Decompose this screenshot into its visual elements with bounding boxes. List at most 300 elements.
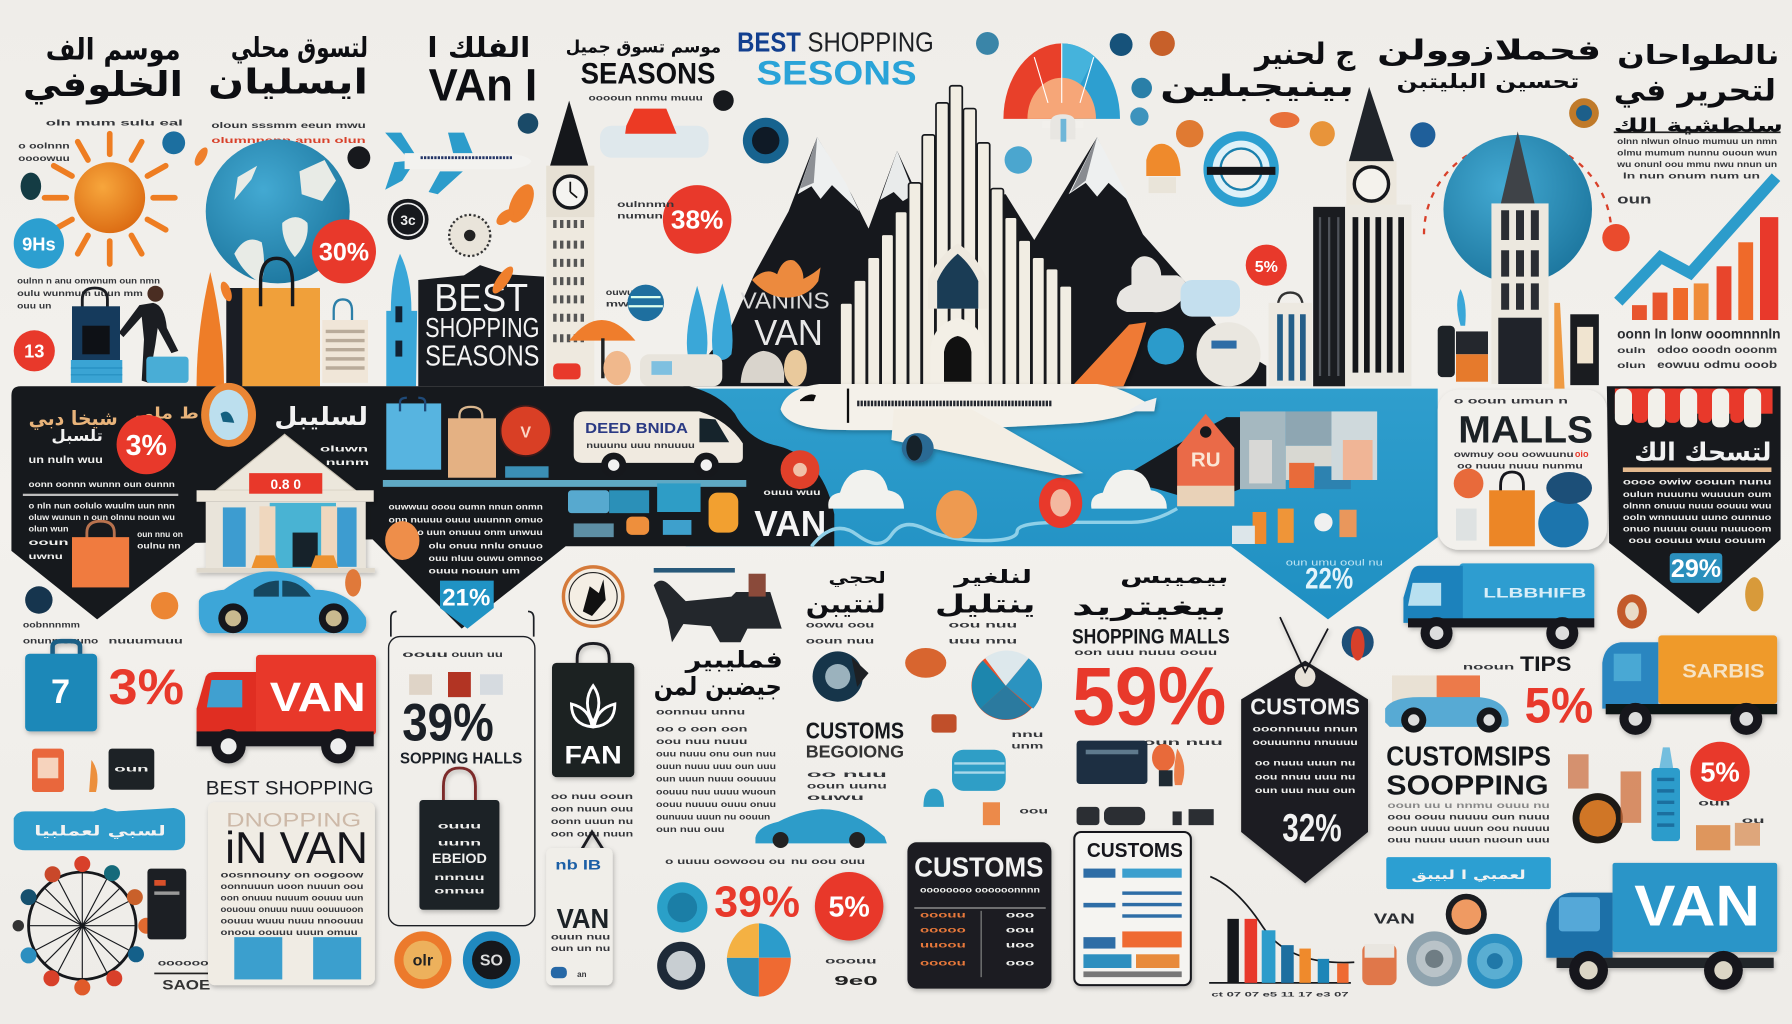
heading: arabic center: فمليبير — [685, 647, 783, 673]
text block: small notes center: mwnu — [606, 299, 646, 308]
text block: shield body: oooo owiw oouun nunu — [1623, 478, 1772, 487]
text block: shield lines: uwnu — [29, 552, 63, 561]
text block: left notes: ouu un — [17, 302, 52, 311]
tag: customs 32%: 32% — [1282, 807, 1342, 850]
text block: shield lines — [23, 455, 183, 561]
panel: dark band left — [11, 386, 834, 629]
text: malls: MALLS — [1458, 408, 1593, 450]
text block: under bag: oon ouu nuun — [551, 830, 633, 839]
icon: sun — [45, 134, 175, 264]
icon: black bag: EBEIOD — [432, 851, 487, 866]
icons: small items — [32, 749, 154, 792]
text block: in van body: oonnuuun uoon nuuun oou — [221, 882, 364, 891]
tag: customs 32%: oun uuu nuu oun — [1255, 786, 1356, 795]
badge: red 38% — [663, 185, 731, 254]
icon: bag fan — [552, 643, 634, 777]
text block: center column: oonnuu unnu — [656, 707, 745, 716]
icon: blue blob — [1538, 499, 1589, 547]
text block: shield 2: ouu nluu ouwu omnoo — [429, 554, 543, 563]
badge: grey seal — [449, 215, 490, 256]
heading: arabic column 2: olumnnenn anun olun — [211, 136, 366, 145]
text: malls notes: o ooun umun n — [1454, 396, 1568, 405]
text: shield heading — [29, 403, 199, 445]
text block: customsips body: oou oouu nuuuu oun nuuu — [1387, 812, 1550, 821]
text: blue panel 22%: oun umu ooul nu — [1286, 558, 1383, 568]
icon: orange figure — [752, 260, 821, 298]
tag: customs 32%: oou nnuu uuu nu — [1255, 772, 1356, 781]
icon: paper sheet — [322, 299, 368, 383]
text block: in van body: onoou oouuu uuun omuu — [221, 928, 358, 937]
top headings — [23, 26, 1783, 180]
text: vaning van — [741, 288, 830, 353]
collage: photo tiles — [1240, 411, 1377, 489]
heading: arabic middle 3: بيميبس — [1120, 567, 1229, 588]
text block: in van body: oon onuuu nuuum oouuu uun — [221, 894, 364, 903]
heading: arabic column 8: wu onunl oou mmu nwu nnun un — [1616, 160, 1777, 169]
heading: best shopping — [737, 26, 934, 93]
heading: arabic center — [654, 647, 783, 702]
text: shopping malls: SHOPPING MALLS — [1072, 623, 1230, 648]
banner: blue left — [14, 808, 185, 850]
sign: best shopping seasons: SEASONS — [425, 341, 539, 373]
banner: blue left: لسبي لعملبيا — [34, 823, 166, 839]
text: lower left small — [154, 959, 221, 993]
heading: arabic middle 2: لنلغير — [953, 567, 1032, 588]
icon: blue ring — [1203, 131, 1279, 207]
text: van white: ouuu wuu — [763, 488, 821, 497]
heading: arabic column 8: لتحرير في — [1614, 74, 1776, 109]
tag: customs 32%: oo nuuu uuun nu — [1255, 759, 1356, 768]
text block: top note row: nu oou ouu — [791, 857, 865, 866]
icon: orange bag malls — [1489, 472, 1535, 546]
icon: white van small — [640, 354, 722, 386]
badge: dark round — [387, 199, 429, 240]
card: customs white — [1074, 832, 1191, 985]
icon: orange disc — [385, 521, 419, 560]
icons: small badges near gauge — [976, 31, 1599, 174]
icons: small tiles column: oou — [1019, 807, 1048, 816]
heading: arabic column 2 — [208, 33, 368, 145]
panel: malls card — [1438, 390, 1607, 550]
icon: bank building — [197, 434, 375, 573]
heading: arabic column 2: oloun sssmm eeun mwu — [211, 121, 366, 130]
text: van white: VAN — [754, 503, 826, 544]
board: customs black: ooouu — [920, 911, 966, 920]
board: customs black: ooo — [1006, 959, 1034, 968]
text block: customsips body: ooun uuuu uuun oou nuuuu — [1387, 824, 1550, 833]
icon: dark bag with blue base — [71, 288, 122, 383]
badge: red 5% center right — [1246, 245, 1287, 286]
icon: blue cones — [687, 283, 733, 362]
panel: outlined card 39% — [389, 611, 535, 926]
text block: under bag: oo nuu ooun — [551, 792, 633, 801]
icon: black bag: uunn — [438, 839, 481, 848]
icons: small right group: ou — [1742, 816, 1765, 825]
heading: best shopping: BEST SHOPPING — [737, 26, 934, 57]
icon: striped building small — [1269, 293, 1312, 386]
icon: grey tower — [1491, 131, 1549, 384]
chart: pie circle — [971, 651, 1042, 720]
icon: red ring badge — [1039, 478, 1082, 528]
text block: left notes — [17, 142, 160, 311]
heading: seasons: ooooun nnmu muuu — [589, 94, 703, 103]
heading: arabic column 1: الخلوفي — [23, 65, 183, 105]
text: right of pie: ooouu — [825, 956, 877, 965]
text block: shield body: onuo nuuuu ouuu nuuuoom — [1623, 524, 1771, 533]
text: customs left: BEGOIONG — [806, 742, 904, 762]
heading: best shopping: SESONS — [757, 55, 917, 93]
panel: dark patch behind tag — [1118, 417, 1249, 503]
text: vaning van: VAN — [754, 312, 823, 353]
text: small notes lower left: onunn ouuno — [23, 636, 98, 645]
text: arabic white heading: nunm — [326, 458, 369, 467]
icons: ring brown — [1617, 577, 1763, 629]
icon: small airplane — [385, 133, 531, 194]
text block: under bag: oon nuun ouu — [551, 804, 633, 813]
icon: round badge above tag — [1342, 626, 1374, 661]
text: 39% red: 39% — [714, 879, 800, 927]
heading: seasons: موسم تسوق جميل — [566, 38, 721, 58]
card: van tag — [546, 832, 613, 985]
text block: chart notes: olun — [1617, 361, 1646, 370]
icons: small tiles column — [923, 714, 1048, 825]
text block: shield lines: un nuln wuu — [29, 455, 103, 466]
icon: bank building: 0.8 0 — [270, 477, 301, 492]
text block: small notes center: ouwun — [606, 288, 640, 297]
icons: small blue panel items — [1232, 509, 1357, 544]
tag: customs 32%: ooonnuuu nnun — [1253, 724, 1358, 733]
text block: shield body: olnnn onuuu nuuu oouuu wuu — [1623, 502, 1772, 511]
heading: arabic column 2: ايسليان — [208, 63, 368, 103]
clouds — [828, 470, 1167, 509]
icon: blue bottle — [1651, 747, 1680, 841]
icon: gauge — [1003, 43, 1120, 142]
text block: in van body: oouuu wuuu nuuu nnoouuu — [221, 916, 364, 925]
text block: shield 2: ouwwuu ooou oumn nnun onmn — [389, 503, 543, 512]
text: right of pie — [825, 956, 878, 988]
sign: best shopping seasons — [418, 265, 544, 386]
text: shield heading: لتسحك الك — [1634, 438, 1771, 467]
text block: top note row — [665, 857, 865, 866]
board: customs black: oooooooo oooooonnnn — [920, 886, 1040, 895]
text block: shield body — [1623, 478, 1772, 545]
icon: blue rocket tower — [386, 254, 417, 386]
icon: orange tag — [1146, 144, 1181, 193]
badge: red ornament: V — [520, 425, 531, 442]
icons: orange pair — [1152, 744, 1184, 786]
text: customs left: ouwu — [807, 793, 864, 802]
badge: orange seal: olr — [413, 953, 433, 970]
badge: red 3% — [117, 415, 176, 474]
text block: card notes: ouun uu — [451, 650, 503, 659]
chart: bars: ct 07 07 e5 11 17 e3 07 — [1211, 992, 1349, 999]
text block: top note row: o uuuu oowoou ou — [665, 857, 785, 866]
text block: card notes — [402, 650, 503, 697]
text: tips — [1463, 651, 1571, 676]
icon: blue bag lower left: 7 — [51, 673, 70, 711]
icon: umbrella — [569, 320, 635, 385]
chart: bars — [1209, 877, 1354, 999]
badge: red 5%: 5% — [828, 892, 870, 924]
heading: van: VAn I — [429, 60, 537, 111]
text block: chart notes: ouln — [1617, 346, 1646, 355]
card: van tag: ouun nuu — [551, 932, 610, 941]
card: van tag: VAN — [557, 903, 609, 934]
icon: small blue blob — [162, 131, 185, 154]
text block: chart notes: odoo ooodn ooonm — [1657, 345, 1777, 356]
icon: blue bag — [386, 398, 441, 470]
text block: left notes: oulu wunmum uuun mm — [17, 289, 143, 298]
icon: dark plane — [654, 568, 782, 642]
badge: blue seal — [463, 931, 520, 989]
badge: red 5% right — [1690, 742, 1750, 801]
text block: left column — [1456, 509, 1477, 541]
text block: in van body: oououu onuuu nuuu oouuuoon — [221, 905, 364, 914]
heading: arabic center: جيضبن لمن — [654, 672, 782, 702]
text: vaning van: VANINS — [741, 288, 830, 314]
heading: customsips soopping: SOOPPING — [1386, 769, 1549, 800]
text: customs left — [806, 717, 904, 802]
badge: dark seal — [657, 942, 705, 990]
badge: blue circle: 9Hs — [22, 233, 56, 254]
text: arabic white heading — [274, 402, 369, 467]
heading: arabic column 1: موسم الف — [46, 32, 181, 67]
text block: chart notes: eowuu odmu ooob — [1657, 360, 1777, 371]
text: malls notes: oo nuuu nuuu nunmu — [1457, 462, 1583, 471]
badge: orange dark ring — [1446, 894, 1487, 935]
icons: small dark dots top — [347, 90, 734, 169]
text: right of pie: 9e0 — [834, 974, 878, 988]
badge: red circle 13: 13 — [24, 341, 44, 362]
icon: white van — [574, 411, 743, 478]
icon: orange ball — [936, 490, 977, 538]
text block: left notes: oooowuu — [18, 154, 70, 163]
badge: orange seal dark rim — [1573, 793, 1623, 843]
heading: arabic column 7 — [1377, 35, 1601, 93]
board: customs black: uuoou — [920, 940, 966, 949]
badge: red circle 13 — [14, 330, 55, 371]
icons: small tiles column: nnu — [1011, 730, 1044, 739]
icon: blue bag lower left — [25, 641, 97, 731]
text: faded heading: DNOPPING — [226, 809, 361, 831]
text: van small: VAN — [1374, 911, 1415, 927]
text block: left notes: oulnn n anu omwnum oun nmn — [17, 276, 160, 285]
board: customs black: uoo — [1006, 940, 1034, 949]
badge: blue circle — [14, 218, 64, 269]
waves — [811, 509, 1177, 546]
heading: arabic middle 2: oou nuu — [949, 620, 1017, 629]
board: customs black: ooooo — [920, 926, 966, 935]
text block: center column: oouuu nuu uuuu wuoun — [656, 787, 776, 796]
chart: pie — [727, 923, 791, 997]
text: in van: iN VAN — [225, 824, 368, 873]
heading: arabic column 1: oln mum sulu eal — [46, 119, 183, 128]
card: van tag: oun un nu — [551, 944, 610, 953]
text: 3% red: 3% — [109, 658, 184, 715]
row: small vehicles — [1077, 807, 1214, 825]
text block: shield lines: oulnu nn — [137, 542, 181, 551]
globe right with dashed arc — [1424, 135, 1611, 283]
icon: black bag: ouuu — [438, 822, 481, 831]
icon: small dark blob — [21, 173, 41, 200]
text block: shield 2 — [389, 503, 543, 576]
heading: arabic middle 1: لحجي — [829, 568, 886, 588]
text block: center column: ouun nuuu uuu oun uuu — [656, 762, 776, 771]
chart: rising bars — [1617, 177, 1778, 320]
icons: small tiles column: unm — [1011, 742, 1043, 751]
icon: blue badge and balloon — [1147, 322, 1261, 386]
text block: center column: ounuuu uuun nu oouun — [656, 812, 770, 821]
icon: dark photo card — [1077, 741, 1147, 784]
heading: arabic column 2: لتسوق محلي — [231, 33, 368, 64]
icons: small right group: oun — [1698, 799, 1731, 808]
icon: blue boxes — [234, 937, 361, 979]
text: small under 59 — [1074, 648, 1223, 747]
heading: arabic column 7: فحملازوولن — [1377, 35, 1601, 66]
board: customs black: oooou — [920, 959, 966, 968]
text: lower left small: SAOE — [162, 978, 210, 993]
text block: shield 2: ouuu nouun um — [429, 567, 520, 576]
text block: center column: oouu nuuuu ouuu onuu — [656, 800, 776, 809]
truck: orange: SARBIS — [1682, 661, 1765, 683]
text: customs left: ooun uunu — [807, 782, 887, 791]
card: customs white: CUSTOMS — [1087, 839, 1183, 862]
icon: black bag: onnuu — [434, 887, 485, 896]
text: customs left: CUSTOMS — [806, 717, 904, 743]
text: best shopping small: BEST SHOPPING — [206, 777, 374, 799]
badge: red ornament near van — [781, 450, 819, 489]
heading: arabic middle 1 — [806, 568, 886, 645]
card: van tag: an — [577, 970, 587, 979]
icon: blue car small — [755, 809, 887, 848]
text: 59%: 59% — [1072, 652, 1226, 743]
panel: blue sea band — [674, 389, 1438, 619]
heading: arabic column 8 — [1614, 41, 1783, 180]
tag: customs 32%: CUSTOMS — [1250, 693, 1360, 719]
icon: blue car — [199, 571, 366, 633]
icon: orange token — [1454, 469, 1483, 498]
text: small notes lower left: oobnnnmm — [23, 620, 80, 629]
icon: white van: DEED BNIDA — [585, 421, 688, 437]
text: tips: TIPS — [1520, 651, 1571, 676]
heading: arabic column 8: olmu mumum nunnu ououn wun — [1617, 148, 1777, 157]
badge: blue 21%: 21% — [442, 585, 490, 612]
icon: dark blue creature — [1546, 472, 1592, 504]
board: customs black: ooo — [1006, 911, 1034, 920]
text: small under 59: oon uuu nuuu oouu — [1074, 648, 1217, 657]
icons: small right group — [1568, 754, 1765, 850]
icon: orange cone — [197, 272, 224, 386]
text block: small notes center: oulnnmn — [617, 200, 674, 209]
left shield content — [23, 403, 199, 587]
icon: orange tag — [905, 648, 946, 678]
sign: best shopping seasons: SHOPPING — [425, 312, 539, 343]
text: shield heading: ط ملي — [135, 403, 199, 423]
heading: customsips soopping — [1386, 741, 1551, 800]
text block: shield body: ooln wnnuuuu uuno ounnuo — [1623, 513, 1772, 522]
icon: orange shopping bag — [226, 258, 320, 386]
car: small blue with orange — [1385, 675, 1509, 733]
text block: chart notes: oonn ln lonw ooomnnnln — [1617, 326, 1781, 341]
text block: in van body — [221, 871, 365, 937]
badge: round dark emblem — [563, 567, 623, 626]
icon: blue boxes row — [568, 483, 738, 537]
card: van tag: nb IB — [555, 858, 601, 873]
divider shelf — [383, 480, 746, 487]
board: customs black: CUSTOMS — [914, 852, 1043, 883]
text block: shield lines: ooun — [29, 538, 69, 547]
icon: striped blue ball — [627, 285, 664, 321]
icon: dark round — [813, 651, 869, 702]
text: blue panel 22%: 22% — [1305, 563, 1353, 596]
text: blue panel 22% — [1286, 558, 1383, 596]
icon: black bag — [419, 768, 499, 910]
icon: figure grey — [741, 350, 807, 386]
badge: blue 29%: 29% — [1671, 555, 1721, 583]
icon: cloud right — [1091, 470, 1167, 509]
text: malls notes: oio — [1575, 449, 1589, 459]
text block: left notes: o oolnnn — [18, 142, 70, 151]
heading: arabic middle 2: uuu nnu — [949, 636, 1017, 645]
text block: shield lines: oluw wunun n oun olnnu noun wu — [29, 513, 175, 522]
truck: blue big van — [1546, 863, 1777, 990]
badge: orange seal — [394, 931, 451, 989]
badge: blue seal: SO — [480, 953, 503, 970]
icon: small jar left of seals — [1362, 944, 1397, 985]
text block: under bag — [551, 792, 633, 839]
icons: small near car — [25, 569, 361, 619]
text block: chart notes — [1617, 326, 1781, 371]
heading: van — [427, 33, 537, 111]
truck: blue top right: LLBBHIFB — [1483, 586, 1586, 601]
badge: red small right — [1602, 224, 1630, 251]
text block: under bag: oonn uuun nu — [551, 817, 633, 826]
text block: shield 2: olu onuu nnlu onuuo — [429, 542, 543, 551]
badge: blue round — [743, 118, 789, 163]
text block: shield body: oou oouuu wuu oouum — [1629, 536, 1766, 545]
icon: white van: nuuunu uuu nnuuuu — [586, 441, 695, 450]
text: arabic white heading: لسليبل — [274, 402, 368, 431]
icon: tan bag — [448, 407, 496, 478]
heading: arabic column 1 — [23, 32, 183, 128]
tag: orange price tag — [1177, 414, 1234, 506]
text block: shield 2: ouu oo uun onuuu onm unwuu — [389, 528, 543, 537]
icon: dark phone — [147, 869, 186, 939]
panel: right dark shield — [1607, 386, 1781, 614]
text: malls notes — [1454, 396, 1589, 471]
text block: center column: oo o oon oon — [656, 724, 748, 733]
icon: red truck: VAN — [270, 674, 366, 720]
text: customs left: oo nuu — [807, 770, 887, 779]
badge: red 5% right: 5% — [1700, 757, 1740, 788]
banner: blue right: لعمبي ا لبيبق — [1411, 867, 1526, 882]
skyline small items — [1438, 289, 1599, 389]
badge: red 30% — [312, 219, 376, 283]
text: malls notes: owmuy oou oowuunu — [1454, 450, 1574, 459]
truck: blue big van: VAN — [1634, 875, 1760, 939]
text block: customsips body: ouu nuuu uuun nuoun uuu — [1387, 835, 1550, 844]
truck: blue top right — [1403, 563, 1594, 649]
icon: cloud left — [828, 470, 904, 509]
heading: arabic column 8: نالطواحان — [1617, 41, 1779, 71]
castle — [840, 86, 1072, 389]
heading: arabic middle 1: ooun nuu — [806, 636, 874, 645]
badge: blue 21% — [440, 581, 494, 629]
badge: red ornament — [501, 406, 551, 478]
text: sopping halls: SOPPING HALLS — [400, 750, 523, 767]
icon: bag fan: FAN — [565, 741, 622, 769]
icon: blue cube — [146, 357, 189, 383]
